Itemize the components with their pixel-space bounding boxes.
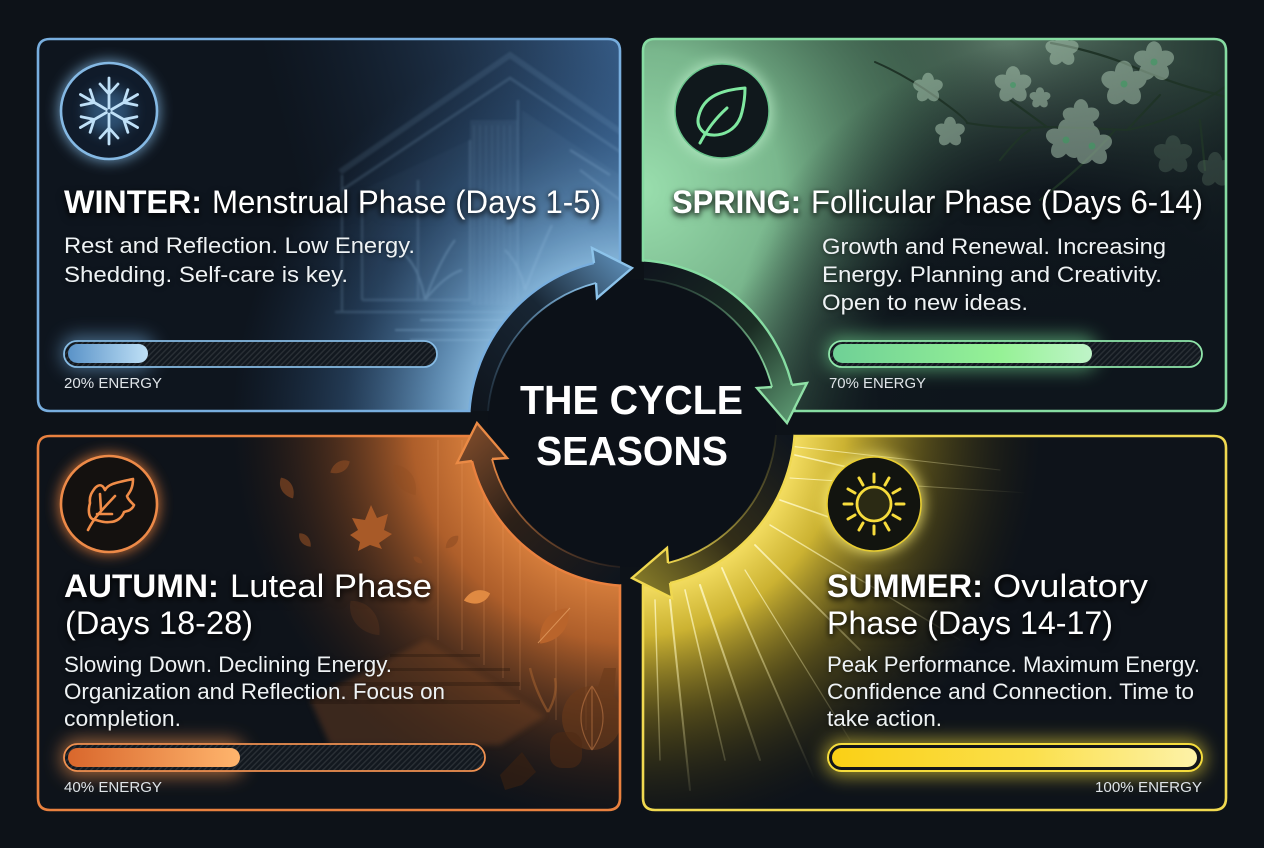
summer description: take action. bbox=[827, 706, 942, 731]
autumn energy bar bbox=[62, 740, 485, 776]
autumn energy label: 40% ENERGY bbox=[64, 780, 162, 796]
spring description bbox=[822, 234, 1166, 315]
winter description bbox=[64, 233, 415, 287]
arrow: autumn to winter bbox=[457, 423, 620, 586]
arrow: winter to spring bbox=[469, 248, 632, 411]
arrow: spring to summer bbox=[644, 260, 807, 423]
summer title bbox=[827, 568, 1148, 641]
icon: snowflake bbox=[59, 61, 159, 161]
icon: autumn leaf bbox=[59, 454, 159, 554]
winter title: WINTER: bbox=[64, 184, 202, 220]
winter description: Shedding. Self-care is key. bbox=[64, 262, 348, 287]
summer title: Ovulatory bbox=[993, 568, 1148, 604]
summer energy label: 100% ENERGY bbox=[1095, 780, 1202, 796]
icon: leaf bbox=[673, 62, 771, 160]
panel: winter bbox=[38, 39, 625, 411]
winter energy bar bbox=[62, 336, 437, 370]
autumn description: completion. bbox=[64, 706, 181, 731]
winter title: Menstrual Phase (Days 1-5) bbox=[212, 184, 601, 220]
summer description: Confidence and Connection. Time to bbox=[827, 679, 1194, 704]
summer title: SUMMER: bbox=[827, 568, 983, 604]
panel: autumn bbox=[38, 436, 622, 810]
summer title: Phase (Days 14-17) bbox=[827, 605, 1113, 641]
autumn title bbox=[64, 568, 432, 641]
spring description: Growth and Renewal. Increasing bbox=[822, 234, 1166, 259]
panel: summer bbox=[643, 436, 1226, 810]
panel: spring bbox=[643, 33, 1235, 411]
summer description bbox=[827, 652, 1200, 731]
autumn title: Luteal Phase bbox=[230, 568, 432, 604]
icon: maple leaf bbox=[350, 505, 392, 551]
winter energy label: 20% ENERGY bbox=[64, 376, 162, 392]
spring description: Energy. Planning and Creativity. bbox=[822, 262, 1162, 287]
center disc bbox=[488, 279, 776, 567]
autumn description bbox=[64, 652, 445, 731]
summer energy bar bbox=[825, 740, 1205, 776]
center title: SEASONS bbox=[536, 428, 728, 474]
arrow: summer to autumn bbox=[632, 435, 795, 598]
autumn description: Organization and Reflection. Focus on bbox=[64, 679, 445, 704]
autumn title: AUTUMN: bbox=[64, 568, 219, 604]
spring energy label: 70% ENERGY bbox=[829, 376, 926, 392]
spring description: Open to new ideas. bbox=[822, 290, 1028, 315]
illustration: frosted house bbox=[335, 55, 625, 340]
center title bbox=[520, 377, 743, 474]
summer description: Peak Performance. Maximum Energy. bbox=[827, 652, 1200, 677]
spring energy bar bbox=[827, 336, 1202, 370]
spring title: SPRING: bbox=[672, 184, 801, 220]
autumn title: (Days 18-28) bbox=[65, 605, 253, 641]
icon: sun bbox=[825, 455, 923, 553]
center title: THE CYCLE bbox=[520, 377, 743, 423]
illustration: blossom branch bbox=[875, 33, 1235, 200]
illustration: sun rays bbox=[654, 446, 1015, 791]
spring title: Follicular Phase (Days 6-14) bbox=[811, 184, 1203, 220]
illustration: boardwalk, leaves and pumpkin bbox=[276, 440, 622, 790]
autumn description: Slowing Down. Declining Energy. bbox=[64, 652, 392, 677]
winter description: Rest and Reflection. Low Energy. bbox=[64, 233, 415, 258]
